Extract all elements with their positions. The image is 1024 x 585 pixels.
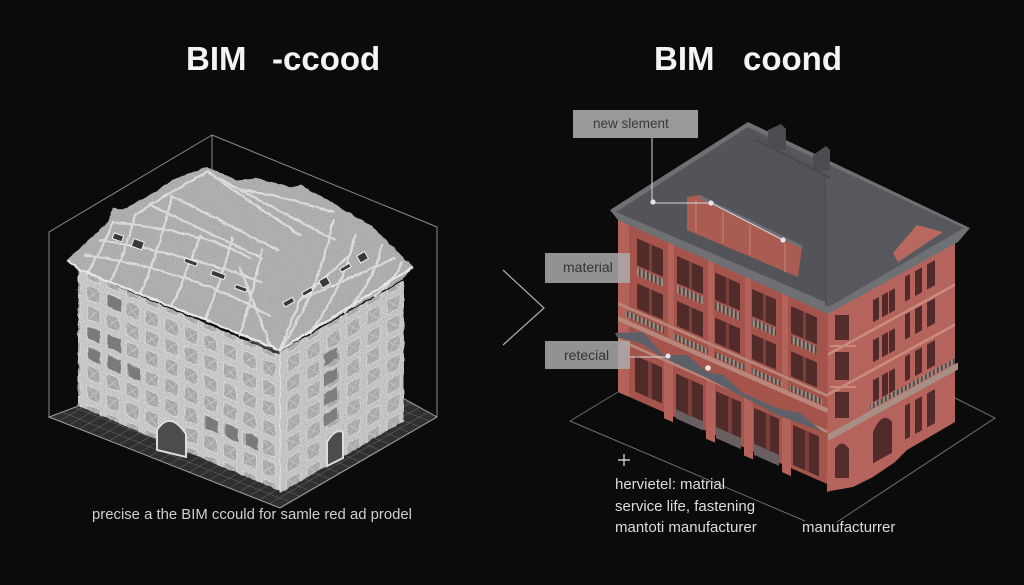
label: manufacturer: manufacturrer [802,519,895,536]
text block: attributes: service life, fastening [615,498,755,515]
caption: left: precise a the BIM ccould for samle red ad prodel [92,506,412,523]
glass highlights [648,243,809,472]
label: new element: new slement [593,116,669,131]
canopy [615,332,823,432]
chamfer bands [830,345,856,388]
left wall [618,220,828,492]
leader lines [630,138,786,371]
chamfer windows [835,315,849,478]
right wall windows and bands [828,248,958,488]
ground outline [570,392,995,522]
title: left: BIM [186,40,246,77]
arrow: chevron [503,270,544,345]
pilasters [618,220,791,476]
roof skylights [112,233,368,307]
chimneys [768,124,830,172]
label: retecial: retecial [564,347,609,363]
label: material [545,253,630,283]
title: right: coond [743,40,842,77]
bounding box wireframe [49,135,437,417]
wireframe building [67,167,413,493]
panel: coloured building model [545,110,995,522]
right wall [827,236,955,492]
floor grid [49,330,437,508]
ground plinths [676,410,779,466]
arched doors [157,421,343,466]
balconies [626,263,822,405]
label: new element [573,110,698,138]
window columns [635,237,819,476]
roof [610,122,970,314]
panel: wireframe building model [49,135,437,508]
icon: plus [618,454,630,466]
label: material: material [563,259,613,275]
title: left: -ccood [272,40,380,77]
title: right: BIM [654,40,714,77]
label: retecial [545,341,630,369]
roof ribs [85,172,402,350]
text block: attributes: mantoti manufacturer [615,519,757,536]
right facade [280,280,404,493]
floor bands [618,302,828,433]
dormer [687,195,802,277]
roof [67,167,413,350]
left facade [78,270,280,491]
gable [893,225,943,262]
text block: attributes: hervietel: matrial [615,476,725,493]
